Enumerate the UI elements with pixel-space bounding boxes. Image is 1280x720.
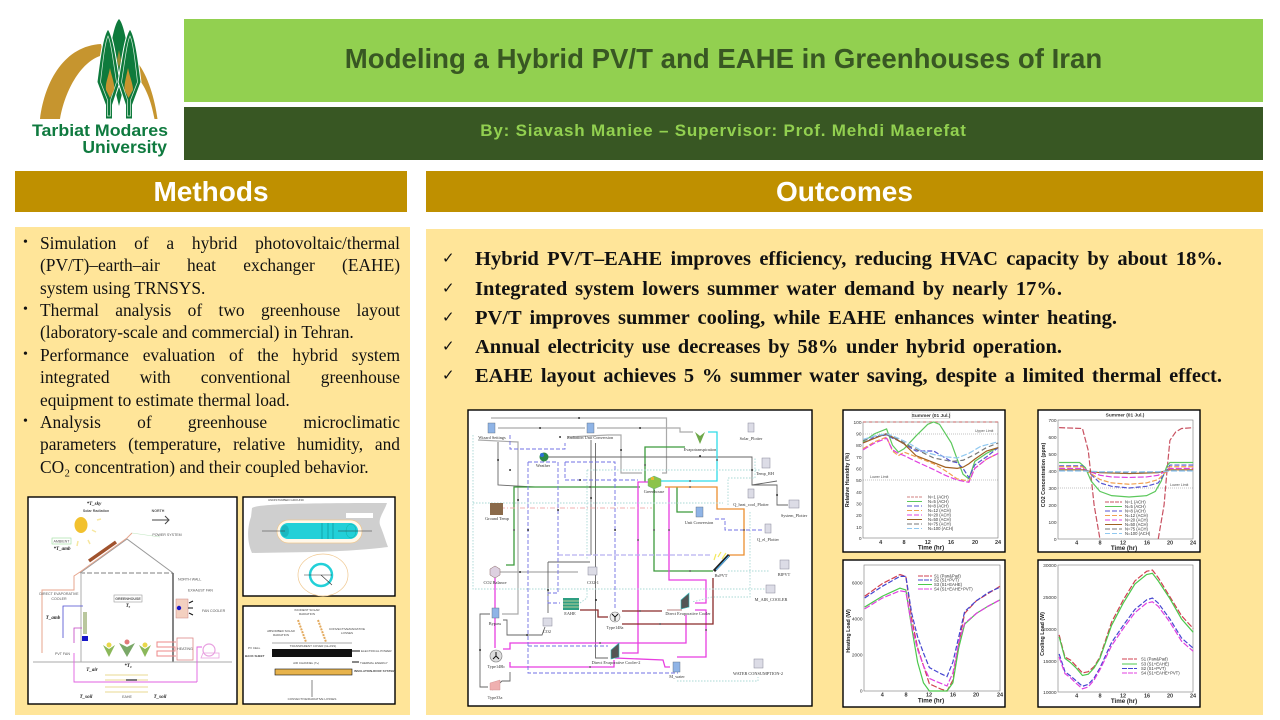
outcome 5: EAHE layout achieves 5 % summer water saving, despite a limited thermal effect.	[475, 365, 1222, 387]
chart: heating load: 4000	[852, 616, 863, 622]
diagram: greenhouse schematic: COOLER	[51, 597, 67, 601]
diagram: PV/T air channel: ELECTRICAL POWER	[361, 649, 392, 653]
chart: CO2 concentration: 12	[1120, 540, 1126, 546]
component labels: CO2-1	[587, 580, 599, 585]
panel: methods: •	[23, 302, 28, 317]
chart: cooling load: 4	[1075, 694, 1079, 700]
chart: heating load: 20	[973, 692, 979, 698]
diagram: EAHE tube: UNDISTURBED GROUND	[268, 498, 305, 502]
component labels: Unit Conversion	[685, 520, 714, 525]
chart: relative humidity: 20	[972, 540, 978, 546]
diagram: greenhouse schematic: NORTH WALL	[178, 578, 201, 582]
outcome 5: ✓	[442, 366, 455, 384]
component labels: Q_heat_cool_Plotter	[733, 502, 769, 507]
chart: CO2 concentration: 400	[1048, 469, 1057, 475]
chart: relative humidity: 30	[856, 502, 862, 508]
component labels: Type148a	[607, 625, 624, 630]
component labels: Bypass	[489, 621, 502, 626]
diagram: PV/T air channel: AIR CHANNEL (Tₐ)	[293, 661, 319, 665]
diagram: greenhouse schematic: DIRECT EVAPORATIVE	[39, 592, 79, 596]
chart: relative humidity: Relative Humidity (%)	[845, 453, 851, 507]
diagram: PV/T air channel: ABSORBED SOLAR	[267, 629, 296, 633]
legend: S2 (S1+PVT)	[934, 578, 959, 582]
diagram: greenhouse schematic: POWER SYSTEM	[152, 533, 182, 537]
chart: heating load: Time (hr)	[918, 698, 944, 704]
chart: CO2 concentration: 200	[1048, 503, 1057, 509]
chart: relative humidity: 60	[856, 466, 862, 472]
bullet: simulation: Simulation of a hybrid photovoltaic/thermal	[40, 233, 400, 253]
chart: CO2 concentration	[1038, 410, 1200, 552]
component labels: Solar_Plotter	[740, 436, 763, 441]
chart: heating load: 16	[950, 692, 956, 698]
legend: N=1 (ACH)	[928, 494, 949, 500]
diagram: greenhouse schematic: Solar Radiation	[83, 509, 109, 513]
bullet: performance evaluation: equipment to estimate thermal load.	[40, 390, 290, 410]
chart: cooling load: 20000	[1043, 627, 1057, 633]
methods text background	[15, 227, 410, 715]
legend: N=12 (ACH)	[928, 508, 952, 513]
diagram: greenhouse schematic	[28, 497, 237, 704]
component labels: Radiation Unit Conversion	[567, 435, 614, 440]
legend: S4 (S1+EAHE+PVT)	[1141, 670, 1180, 676]
chart: cooling load: 8	[1098, 694, 1102, 700]
chart: relative humidity: 70	[856, 455, 862, 461]
outcome 4: Annual electricity use decreases by 58% under hybrid operation.	[475, 336, 1062, 358]
legend: N=50 (ACH)	[1125, 522, 1149, 527]
diagram: greenhouse schematic: FAN COOLER	[202, 609, 226, 613]
evaporative cooler	[63, 606, 88, 643]
chart: CO2 concentration: 24	[1190, 540, 1197, 546]
chart: relative humidity: 100	[853, 420, 862, 426]
component labels: Ground Temp	[485, 516, 509, 521]
connections: blue dashed	[510, 435, 762, 673]
chart: CO2 concentration: 600	[1048, 435, 1057, 441]
chart: CO2 concentration: 100	[1048, 520, 1057, 526]
diagram: greenhouse schematic: T_amb	[46, 616, 61, 621]
legend: N=75 (ACH)	[1125, 526, 1149, 532]
diagram: greenhouse schematic: T_air	[86, 668, 98, 673]
chart: relative humidity: 24	[995, 540, 1002, 546]
diagram: greenhouse schematic: *T_sky	[87, 502, 102, 507]
diagram: PV/T air channel: THERMAL ENERGY	[360, 661, 388, 665]
title bar: Modeling a Hybrid PV/T and EAHE in Greenhouses of Iran	[345, 43, 1102, 74]
chart: cooling load: 24	[1190, 694, 1197, 700]
component labels: Type33a	[488, 695, 502, 700]
bullet: thermal analysis: (laboratory-scale and commercial) in Tehran.	[40, 322, 354, 342]
chart: cooling load: 20	[1167, 694, 1173, 700]
legend: N=1 (ACH)	[1125, 500, 1146, 504]
legend: N=8 (ACH)	[1125, 508, 1146, 514]
outcome 3: PV/T improves summer cooling, while EAHE enhances winter heating.	[475, 307, 1117, 329]
legend: N=12 (ACH)	[1125, 513, 1149, 518]
diagram: PV/T air channel: CONVECTIVE/RADIATIVE	[329, 627, 365, 631]
chart: cooling load: Time (hr)	[1111, 698, 1137, 705]
bullet: performance evaluation: integrated with conventional greenhouse	[40, 367, 400, 387]
chart: CO2 concentration: 500	[1048, 452, 1057, 458]
outcome 2: ✓	[442, 279, 455, 297]
connections: magenta	[495, 482, 706, 667]
chart: CO2 concentration: Lower Limit	[1170, 483, 1188, 487]
chart: relative humidity: Lower Limit	[870, 475, 888, 479]
chart: relative humidity: Summer (01 Jul.)	[912, 413, 951, 419]
component icons	[488, 423, 799, 690]
diagram: greenhouse schematic: T_soil	[80, 695, 93, 700]
outcome 3: ✓	[442, 308, 455, 326]
chart: relative humidity: 20	[856, 513, 862, 519]
component labels: WATER CONSUMPTION-2	[733, 671, 783, 676]
heading: Methods	[15, 171, 407, 212]
diagram: greenhouse schematic: EAHE	[122, 695, 132, 699]
panel: methods: •	[23, 414, 28, 429]
diagram: greenhouse schematic: EXHAUST FAN	[188, 588, 213, 592]
legend: N=50 (ACH)	[928, 517, 952, 522]
chart: cooling load: 25000	[1043, 595, 1057, 601]
logo: Tarbiat Modares University: Tarbiat Modares	[32, 121, 168, 140]
chart: cooling load: 15000	[1043, 659, 1057, 665]
component labels: CO2	[543, 629, 551, 634]
author bar: By: Siavash Maniee – Supervisor: Prof. Mehdi Maerefat	[480, 121, 967, 140]
diagram: TRNSYS model	[468, 410, 812, 706]
chart: CO2 concentration: 300	[1048, 486, 1057, 492]
chart: heating load: 6000	[852, 580, 863, 586]
outcome 4: ✓	[442, 337, 455, 355]
chart: heating load: 12	[926, 692, 932, 698]
outcome 2: Integrated system lowers summer water demand by nearly 17%.	[475, 278, 1062, 300]
chart: CO2 concentration: CO2 Concentration (ppm)	[1041, 443, 1047, 507]
diagram: greenhouse schematic: Tₐ	[126, 604, 131, 609]
diagram: PV/T air channel: RADIATION	[299, 612, 315, 616]
outcome 1: Hybrid PV/T–EAHE improves efficiency, reducing HVAC capacity by about 18%.	[475, 248, 1222, 270]
component labels: Temp_RH	[756, 471, 774, 476]
bullet: performance evaluation: Performance evaluation of the hybrid system	[40, 345, 400, 365]
chart: CO2 concentration: 0	[1054, 537, 1057, 543]
component labels: System_Plotter	[781, 513, 808, 518]
component labels: Q_el_Plotter	[757, 537, 780, 542]
chart: heating load	[843, 560, 1005, 707]
chart: relative humidity	[843, 410, 1005, 552]
chart: CO2 concentration: 16	[1144, 540, 1150, 546]
bullet: simulation: system using TRNSYS.	[40, 278, 205, 298]
bullet: microclimatic analysis	[23, 412, 400, 477]
heading: Outcomes: Outcomes	[776, 176, 913, 207]
logo: Tarbiat Modares University	[32, 19, 168, 157]
legend	[918, 574, 973, 592]
bullet: microclimatic analysis: Analysis of greenhouse microclimatic	[40, 412, 400, 432]
chart: CO2 concentration: 20	[1167, 540, 1173, 546]
legend	[1105, 500, 1151, 536]
diagram: EAHE tube	[243, 497, 395, 596]
bullet: thermal analysis: Thermal analysis of two greenhouse layout	[40, 300, 400, 320]
component labels: M_water	[669, 674, 685, 679]
chart: relative humidity: 40	[856, 490, 862, 496]
chart: CO2 concentration: 700	[1048, 418, 1057, 424]
diagram: PV/T air channel: RADIATION	[273, 633, 289, 637]
bullet: simulation	[23, 233, 400, 298]
connections: green	[506, 447, 713, 571]
legend: N=100 (ACH)	[928, 526, 954, 531]
heading: Methods: Methods	[153, 176, 269, 207]
icon: sun	[74, 517, 88, 533]
chart: relative humidity: 0	[859, 536, 862, 542]
diagram: PV/T air channel: LOSSES	[341, 631, 353, 635]
chart: cooling load: Cooling Load (W)	[1040, 612, 1046, 656]
chart: relative humidity: 16	[948, 540, 954, 546]
chart: heating load: 0	[860, 688, 863, 694]
diagram: greenhouse schematic: HEATING	[177, 647, 193, 651]
blower	[203, 644, 215, 656]
component labels: Wizard Settings	[478, 435, 506, 440]
legend: N=8 (ACH)	[928, 504, 949, 508]
diagram: PV/T air channel: INSULATION-ROOF SYSTEM	[354, 669, 395, 673]
chart: relative humidity: 8	[902, 540, 906, 546]
diagram: PV/T air channel: TRANSPARENT COVER (GLASS)	[290, 644, 336, 648]
diagram: greenhouse schematic: PVT FAN	[55, 652, 70, 656]
heating coil	[157, 642, 176, 656]
chart: cooling load: 12	[1120, 694, 1126, 700]
legend: S3 (S1+EAHE)	[934, 582, 963, 587]
chart: relative humidity: 80	[856, 443, 862, 449]
chart: relative humidity: Time (hr)	[918, 544, 944, 552]
panel: outcomes	[426, 171, 1263, 715]
legend: S1 (Pan&Pad)	[934, 574, 961, 578]
buried tube	[105, 675, 148, 692]
component labels: EAHE	[564, 611, 576, 616]
title bar	[184, 19, 1263, 102]
chart: CO2 concentration: 8	[1098, 540, 1102, 546]
author bar	[184, 107, 1263, 160]
chart: heating load: 4	[881, 692, 885, 698]
legend: N=5 (ACH)	[928, 499, 949, 504]
component labels: Type148b	[487, 664, 505, 669]
legend: S3 (S1+EAHE)	[1141, 662, 1170, 666]
chart: cooling load: 16	[1144, 694, 1150, 700]
diagram: PV/T air channel: INCIDENT SOLAR	[294, 608, 320, 612]
legend	[907, 494, 954, 531]
chart: heating load: 2000	[852, 652, 863, 658]
connections: teal dotted	[473, 435, 770, 681]
connections: grey	[478, 418, 693, 614]
panel: methods: •	[23, 235, 28, 250]
component labels: Greenhouse	[644, 489, 664, 494]
fan	[176, 599, 188, 618]
component labels: Direct Evaporative Cooler-2	[592, 660, 640, 665]
component labels: Evapotranspiration	[684, 447, 717, 452]
chart: relative humidity: 90	[856, 432, 862, 438]
component labels: M_AIR_COOLER	[755, 597, 787, 602]
line nodes	[480, 418, 777, 650]
chart: cooling load: 30000	[1043, 563, 1057, 569]
diagram: PV/T air channel: PV CELL	[248, 646, 261, 650]
chart: cooling load	[1038, 560, 1200, 707]
component labels: BIPVT	[778, 572, 791, 577]
connections: dark red	[580, 578, 713, 624]
chart: CO2 concentration: Summer (01 Jul.)	[1106, 412, 1145, 418]
logo: Tarbiat Modares University: University	[82, 137, 167, 157]
legend: S1 (Pan&Pad)	[1141, 656, 1168, 662]
bullet: simulation: (PV/T)–earth–air heat exchanger (EAHE)	[40, 255, 400, 275]
diagram: greenhouse schematic: *T_amb	[54, 547, 71, 552]
panel: methods: •	[23, 347, 28, 362]
diagram: greenhouse schematic: T_soil	[154, 695, 167, 700]
component labels	[478, 435, 808, 700]
diagram: PV/T air channel: BACK SHEET	[245, 654, 265, 658]
legend: N=75 (ACH)	[928, 522, 952, 526]
diagram: PV/T air channel: CONVECTIVE/RADIATIVE LOSSES	[288, 697, 336, 701]
component labels: CO2 Balance	[483, 580, 507, 585]
diagram: greenhouse schematic: AMBIENT	[54, 540, 70, 544]
outcomes background	[426, 229, 1263, 715]
chart: relative humidity: 50	[856, 478, 862, 484]
panel: methods	[15, 171, 410, 715]
bullet: microclimatic analysis: parameters (temperature, relative humidity, and	[40, 434, 400, 454]
chart: CO2 concentration: 4	[1075, 540, 1079, 546]
diagram: greenhouse schematic: GREENHOUSE	[115, 597, 141, 601]
legend: N=20 (ACH)	[1125, 518, 1149, 522]
legend: N=20 (ACH)	[928, 512, 952, 518]
diagram: PV/T air channel	[243, 606, 395, 704]
chart: heating load: 24	[997, 692, 1004, 698]
bullet: microclimatic analysis: CO₂ concentration) and their coupled behavior.	[40, 457, 369, 477]
diagram: greenhouse schematic: *T₀	[124, 664, 132, 669]
chart: relative humidity: 12	[925, 540, 931, 546]
chart: relative humidity: Upper Limit	[975, 429, 993, 433]
chart: CO2 concentration: Time (hr)	[1111, 545, 1137, 552]
component labels: Direct Evaporative Cooler	[665, 611, 711, 616]
chart: heating load: Heating Load (W)	[846, 609, 852, 653]
legend	[1122, 656, 1180, 676]
legend: S2 (S1+PVT)	[1141, 666, 1166, 671]
component labels: BsPVT	[715, 573, 728, 578]
connections: orange and cyan	[665, 487, 744, 555]
legend: N=5 (ACH)	[1125, 504, 1146, 509]
chart: cooling load: 10000	[1043, 690, 1057, 696]
legend: N=100 (ACH)	[1125, 531, 1151, 536]
outcome 1: ✓	[442, 249, 455, 267]
chart: relative humidity: 4	[879, 540, 883, 546]
legend: S4 (S1+EAHE+PVT)	[934, 586, 973, 592]
bullet: thermal analysis	[23, 300, 400, 342]
diagram: greenhouse schematic: NORTH	[152, 509, 165, 513]
bullet: performance evaluation	[23, 345, 400, 410]
component labels: Weather	[536, 463, 551, 468]
heading: Outcomes	[426, 171, 1263, 212]
chart: relative humidity: 10	[856, 525, 862, 531]
plants	[103, 643, 151, 657]
chart: heating load: 8	[904, 692, 908, 698]
